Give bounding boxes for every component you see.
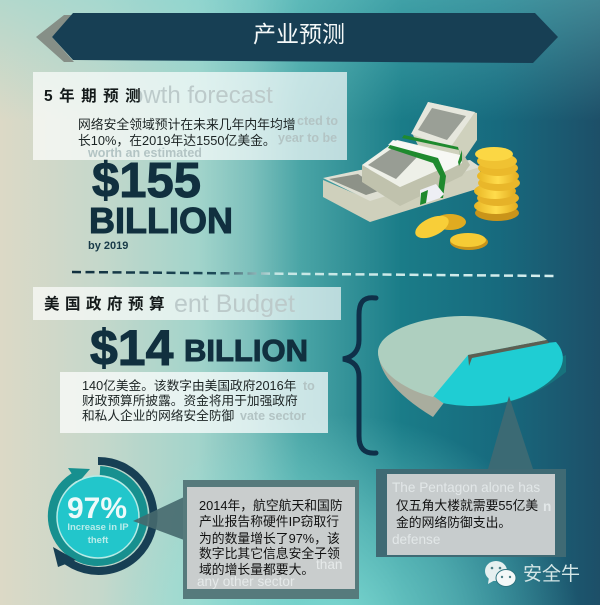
ghost heading over strip: ent Budget <box>174 290 295 318</box>
icon: 97% ring: theft <box>88 535 109 546</box>
residual ghost text: worth an estimated <box>87 146 202 160</box>
stat: $14 billion: $14 <box>90 320 174 376</box>
pentagon description <box>396 498 538 530</box>
logo: WeChat account: 安全牛 <box>523 563 580 585</box>
cyan slice <box>428 342 563 406</box>
pie chart <box>378 316 566 417</box>
icon: 97% ring: 97% <box>67 492 127 525</box>
IP theft description: 数字比其它信息安全子领 <box>199 546 340 561</box>
stat: $14 billion: BILLION <box>184 333 308 368</box>
budget description: 140亿美金。该数字由美国政府2016年 <box>82 378 297 393</box>
IP theft description <box>199 498 343 577</box>
cyan disc <box>57 476 139 558</box>
stat: $155 billion: by 2019 <box>88 240 128 252</box>
title banner: 产业预测 <box>253 21 345 47</box>
IP theft description: 域的增长量都要大。 <box>199 562 314 577</box>
residual ghost text: n <box>543 499 551 514</box>
panel: pentagon callout <box>376 469 566 557</box>
pentagon description: 仅五角大楼就需要55亿美 <box>396 498 538 513</box>
pentagon description: 金的网络防御支出。 <box>396 515 511 530</box>
stat: $155 billion: $155 <box>92 154 201 208</box>
callout pointer: IP theft <box>133 497 184 540</box>
IP theft description: 产业报告称硬件IP窃取行 <box>199 514 339 529</box>
cream slice side wall <box>378 352 446 417</box>
IP theft description: 2014年，航空航天和国防 <box>199 498 343 513</box>
residual ghost text: to <box>303 379 315 393</box>
residual ghost text: any other sector <box>197 574 295 589</box>
budget description <box>82 378 298 423</box>
budget description: 和私人企业的网络安全防御 <box>82 408 234 423</box>
stat: $14 billion <box>90 320 308 376</box>
slice gap wall <box>468 340 549 366</box>
stat: $155 billion: BILLION <box>89 200 233 241</box>
heading: US government budget: 美国政府预算 <box>44 294 170 313</box>
forecast description <box>78 117 296 148</box>
title banner <box>36 13 558 63</box>
translucent text panel <box>33 72 347 160</box>
ghost heading over panel: owth forecast <box>130 82 273 109</box>
icon: chat bubbles <box>485 561 516 586</box>
residual ghost text: cted to <box>297 114 338 128</box>
forecast description: 网络安全领域预计在未来几年内年均增 <box>78 117 296 132</box>
residual ghost text: vate sector <box>240 409 306 423</box>
residual ghost text <box>240 379 315 423</box>
IP theft description: 为的数量增长了97%，该 <box>199 531 340 546</box>
outer navy arrow ring <box>63 461 154 571</box>
residual ghost text: defense <box>392 532 440 547</box>
panel: 5 year forecast <box>33 72 347 160</box>
panel: US government budget <box>33 287 341 433</box>
translucent heading strip <box>33 287 341 320</box>
logo: WeChat account <box>485 561 580 586</box>
icon: 97% ring: Increase in IP <box>67 522 129 533</box>
residual ghost text <box>197 557 342 589</box>
residual ghost text: than <box>316 557 342 572</box>
callout pointer: pentagon <box>488 396 533 469</box>
budget description: 财政预算所披露。资金将用于加强政府 <box>82 393 298 408</box>
curly brace <box>343 298 376 453</box>
icon: 97% ring <box>52 461 154 571</box>
teal arrow ring <box>52 470 143 561</box>
text box <box>60 372 328 433</box>
cyan slice shadow edge <box>443 355 566 407</box>
stat: $155 billion <box>88 154 233 252</box>
residual ghost text <box>87 114 338 160</box>
cream slice <box>378 316 547 397</box>
residual ghost text <box>392 480 551 547</box>
residual ghost text: The Pentagon alone has <box>392 480 540 495</box>
icon: money stacks and gold coins <box>323 102 520 250</box>
panel: IP theft callout <box>183 480 359 599</box>
forecast description: 长10%，在2019年达1550亿美金。 <box>78 133 276 148</box>
heading: 5 year forecast: 5 年 期 预 测 <box>44 86 142 105</box>
residual ghost text: year to be <box>278 131 337 145</box>
